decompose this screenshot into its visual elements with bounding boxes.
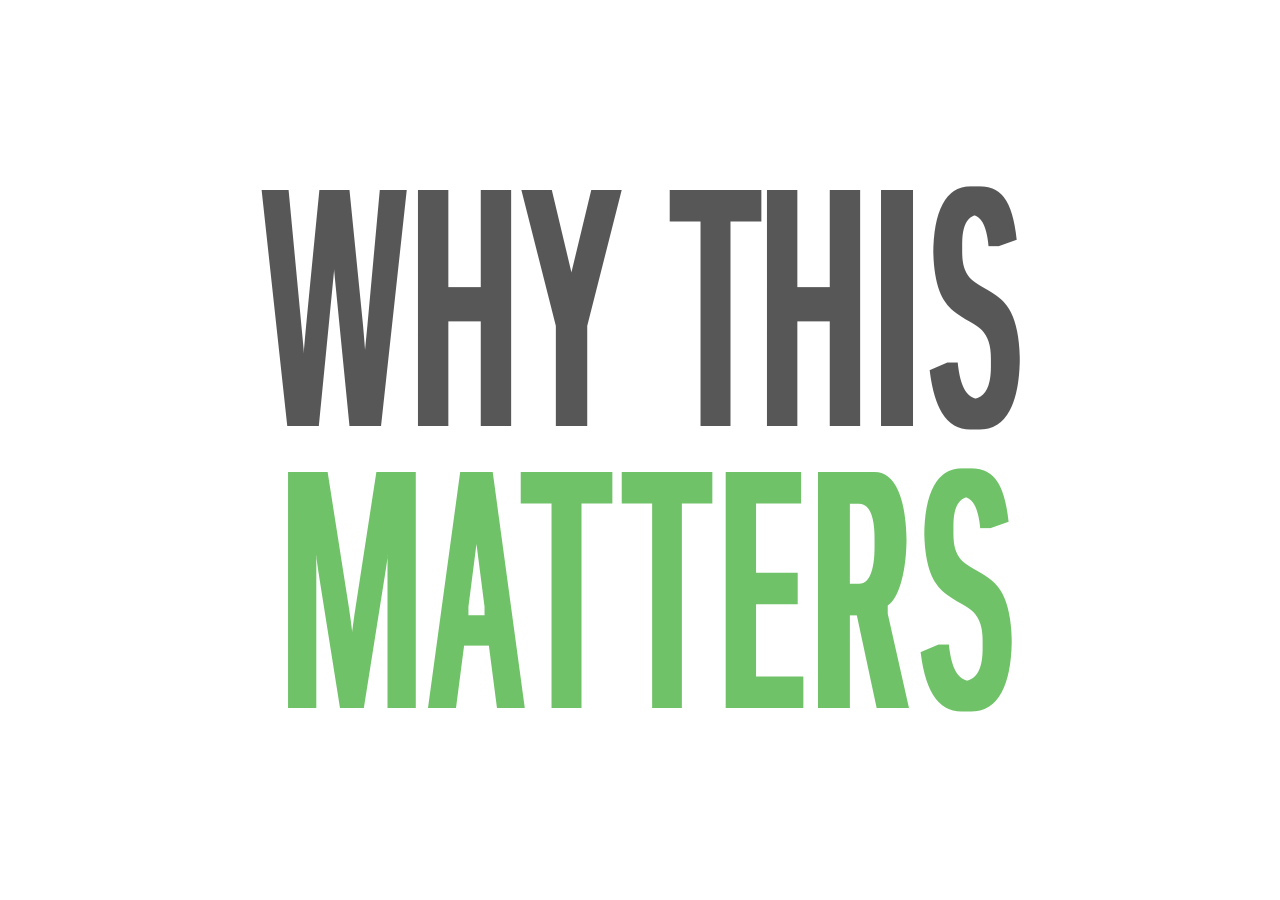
heading line: WHY THIS: I — [876, 109, 918, 505]
heading line: WHY THIS: H — [414, 111, 516, 506]
heading line: MATTERS: S — [921, 391, 1012, 787]
heading line: MATTERS: A — [429, 391, 524, 788]
heading line: MATTERS: M — [279, 392, 424, 788]
heading line: MATTERS: T — [524, 392, 609, 788]
heading line: MATTERS: E — [725, 391, 801, 787]
heading line: MATTERS: R — [817, 393, 906, 788]
heading line: MATTERS — [279, 391, 1012, 788]
heading line: MATTERS: T — [625, 391, 709, 787]
heading line: WHY THIS: W — [264, 109, 406, 506]
heading line: WHY THIS — [264, 109, 1020, 506]
heading line: WHY THIS: S — [930, 109, 1020, 505]
heading line: WHY THIS: T — [673, 110, 758, 506]
heading line: WHY THIS: Y — [522, 109, 621, 506]
heading line: WHY THIS: H — [762, 111, 865, 506]
